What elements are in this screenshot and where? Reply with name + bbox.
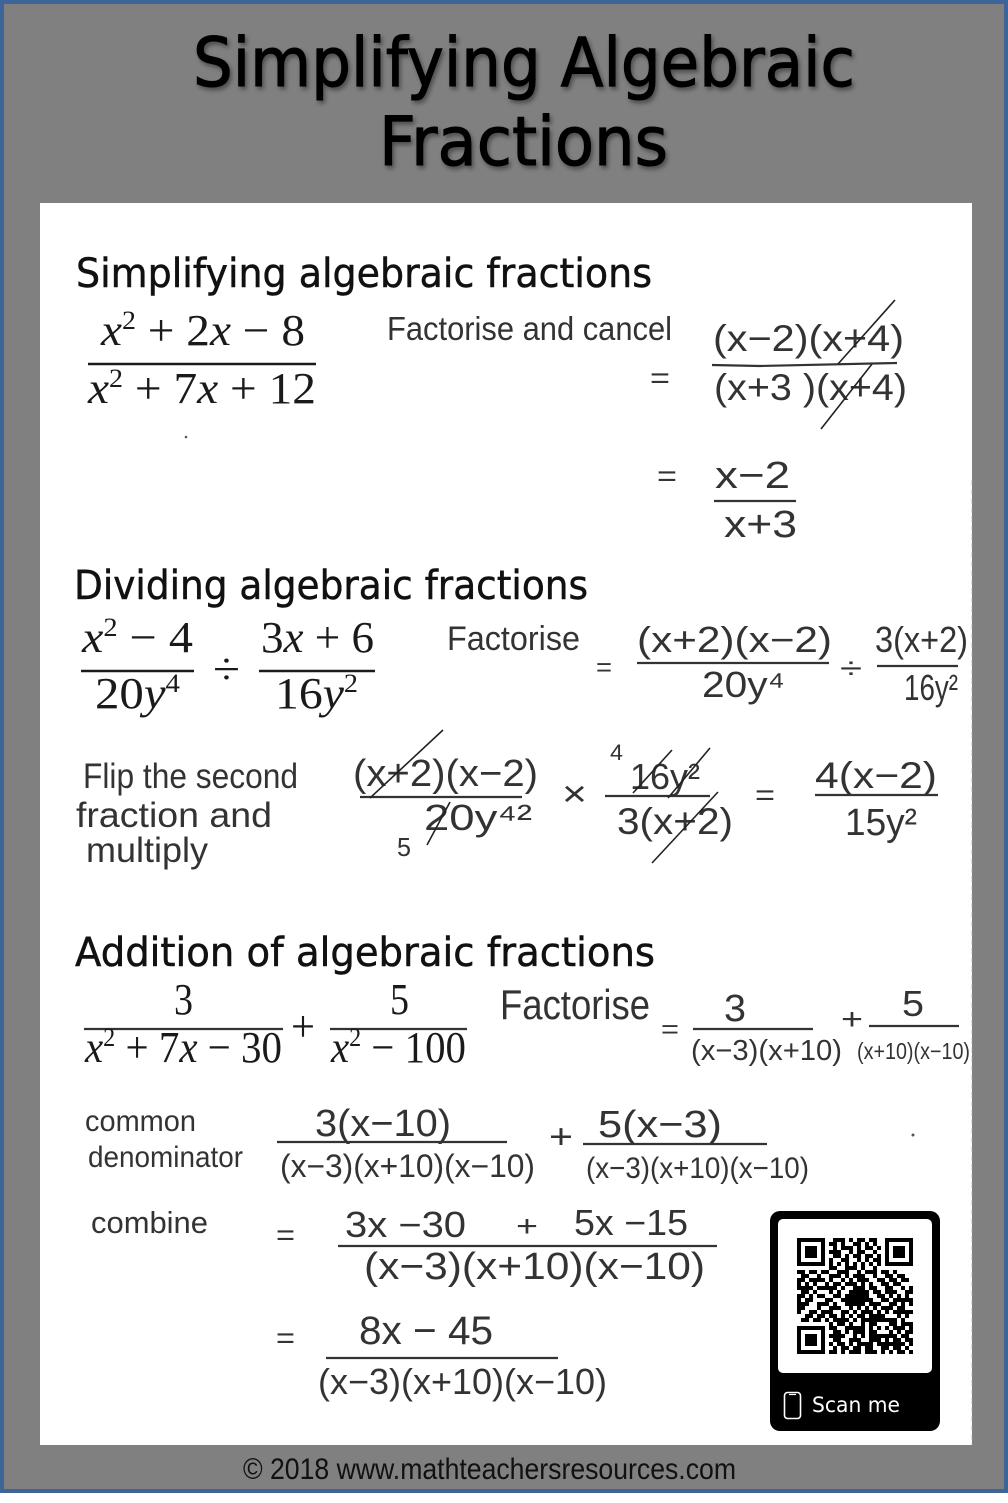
handwritten combined fraction: 5x −15: [574, 1202, 688, 1243]
printed fraction: second: 3x + 6: [261, 613, 374, 662]
equals sign: =: [755, 779, 775, 812]
printed fraction: second: 5: [390, 975, 409, 1024]
note: factorise: Factorise: [500, 981, 650, 1028]
equals sign: =: [661, 1014, 679, 1044]
title: [193, 24, 855, 182]
heading: simplifying: Simplifying algebraic fractions: [76, 251, 652, 297]
handwritten factorised fractions: 20y⁴: [702, 664, 785, 705]
handwritten cancelled fraction: left: 5: [397, 832, 411, 862]
heading: addition: Addition of algebraic fractions: [75, 930, 655, 976]
printed fraction: second: 16y: [275, 669, 342, 718]
handwritten combined fraction: +: [516, 1210, 538, 1243]
footer copyright: © 2018 www.mathteachersresources.com: [243, 1453, 736, 1486]
printed fraction: simplify question: x − 8: [210, 306, 300, 355]
handwritten final quotient: 15y²: [845, 802, 917, 844]
icon: phone: [784, 1392, 800, 1418]
handwritten fraction: common denominator right: [583, 1104, 809, 1185]
handwritten fraction: common denominator right: 5(x−3): [598, 1104, 722, 1146]
QR code card: [770, 1211, 940, 1431]
handwritten factorised fractions: 5: [902, 983, 924, 1024]
printed fraction: second: [259, 613, 375, 718]
note: flip the second fraction and multiply: fraction and: [76, 796, 272, 835]
handwritten cancelled fraction: right: 16y²: [630, 756, 700, 797]
handwritten fraction: common denominator left: 3(x−10): [315, 1103, 451, 1145]
handwritten combined fraction: 3x −30: [345, 1204, 466, 1245]
equals sign: =: [276, 1219, 295, 1252]
section: addition: [75, 930, 970, 1402]
multiply sign: ×: [562, 773, 587, 814]
title: Simplifying Algebraic: [193, 24, 855, 103]
printed fraction: first: [81, 613, 194, 718]
handwritten addition answer: (x−3)(x+10)(x−10): [318, 1361, 607, 1402]
plus sign: +: [291, 1002, 315, 1051]
handwritten factorised fractions: (x+2)(x−2): [637, 619, 832, 660]
printed fraction: first: + 7: [115, 1023, 179, 1072]
printed fraction: first: 4: [166, 669, 180, 698]
note: flip the second fraction and multiply: Flip the second: [83, 757, 298, 796]
printed fraction: first: − 4: [118, 613, 193, 662]
handwritten fraction with cancelled factor: (x+3 )(x+4): [714, 367, 907, 408]
handwritten factorised fractions: 16y²: [904, 667, 958, 708]
equals sign: =: [657, 460, 677, 493]
printed fraction: first: 2: [103, 1023, 115, 1052]
note: common denominator: [85, 1105, 243, 1174]
handwritten cancelled fraction: right: 4: [610, 740, 623, 765]
note: flip the second fraction and multiply: multiply: [86, 831, 209, 870]
note: combine: combine: [91, 1205, 208, 1240]
handwritten factorised fractions: 3(x+2): [875, 619, 968, 660]
handwritten fraction with cancelled factor: (x−2)(x+4): [713, 318, 904, 359]
handwritten combined fraction: [338, 1202, 717, 1288]
section: dividing: [74, 563, 968, 870]
printed fraction: simplify question: x: [87, 364, 110, 413]
handwritten simplified answer: x+3: [724, 504, 797, 546]
printed fraction: simplify question: [87, 306, 316, 413]
title: Fractions: [379, 103, 668, 182]
handwritten factorised fractions: [691, 983, 970, 1067]
printed fraction: first: 3: [174, 975, 193, 1024]
printed fraction: second: 2: [349, 1023, 361, 1052]
handwritten fraction: common denominator left: (x−3)(x+10)(x−10): [280, 1148, 535, 1184]
handwritten simplified answer: x−2: [715, 455, 790, 497]
scan me label: Scan me: [812, 1393, 900, 1417]
printed fraction: second: x: [330, 1023, 350, 1072]
heading: dividing: Dividing algebraic fractions: [74, 563, 588, 609]
printed fraction: simplify question: 2: [109, 364, 123, 393]
handwritten addition answer: [318, 1309, 607, 1402]
note: common denominator: common: [85, 1105, 196, 1138]
handwritten fraction: common denominator right: (x−3)(x+10)(x−10): [586, 1152, 809, 1185]
printed fraction: simplify question: x + 12: [197, 364, 309, 413]
handwritten cancelled fraction: right: [605, 740, 733, 863]
handwritten combined fraction: (x−3)(x+10)(x−10): [364, 1246, 705, 1288]
equals sign: =: [596, 652, 612, 682]
note: factorise and cancel: Factorise and cancel: [387, 310, 672, 347]
equals sign: =: [276, 1322, 295, 1355]
note: flip the second fraction and multiply: [76, 757, 298, 870]
printed fraction: simplify question: x: [100, 306, 123, 355]
printed fraction: first: x − 30: [179, 1023, 288, 1072]
handwritten factorised fractions: ÷: [840, 652, 862, 685]
handwritten factorised fractions: (x+10)(x−10): [857, 1038, 970, 1064]
handwritten factorised fractions: [637, 619, 968, 708]
printed fraction: simplify question: 2: [122, 306, 136, 335]
panel: worksheet: [40, 203, 972, 1445]
handwritten cancelled fraction: left: 20y⁴²: [424, 797, 532, 838]
printed fraction: first: x: [81, 613, 104, 662]
handwritten fraction with cancelled factor: [712, 300, 907, 429]
handwritten factorised fractions: (x−3)(x+10): [691, 1035, 842, 1067]
equals sign: =: [650, 362, 670, 395]
printed fraction: second: − 100: [361, 1023, 466, 1072]
plus sign: +: [549, 1118, 573, 1156]
handwritten final quotient: 4(x−2): [815, 755, 937, 796]
printed fraction: second: 2: [344, 669, 358, 698]
handwritten factorised fractions: +: [841, 1003, 863, 1036]
printed fraction: first: 20y: [95, 669, 163, 718]
section: simplifying: [76, 251, 907, 546]
handwritten cancelled fraction: left: (x+2)(x−2): [353, 753, 538, 795]
division sign: ÷: [213, 645, 240, 694]
handwritten factorised fractions: 3: [724, 988, 746, 1030]
handwritten cancelled fraction: left: [353, 730, 538, 862]
handwritten simplified answer: [714, 455, 797, 546]
handwritten cancelled fraction: right: 3(x+2): [617, 801, 733, 842]
printed fraction: first: x: [84, 1023, 104, 1072]
printed fraction: first: [84, 975, 283, 1072]
note: common denominator: denominator: [88, 1141, 243, 1174]
printed fraction: second: [330, 975, 467, 1072]
handwritten fraction: common denominator left: [277, 1103, 535, 1184]
note: factorise: Factorise: [447, 620, 580, 658]
printed fraction: simplify question: + 2: [136, 306, 210, 355]
printed fraction: simplify question: + 7: [123, 364, 197, 413]
handwritten addition answer: 8x − 45: [359, 1309, 493, 1353]
QR code: [797, 1240, 913, 1352]
printed fraction: first: 2: [103, 613, 118, 642]
handwritten final quotient: [815, 755, 938, 844]
